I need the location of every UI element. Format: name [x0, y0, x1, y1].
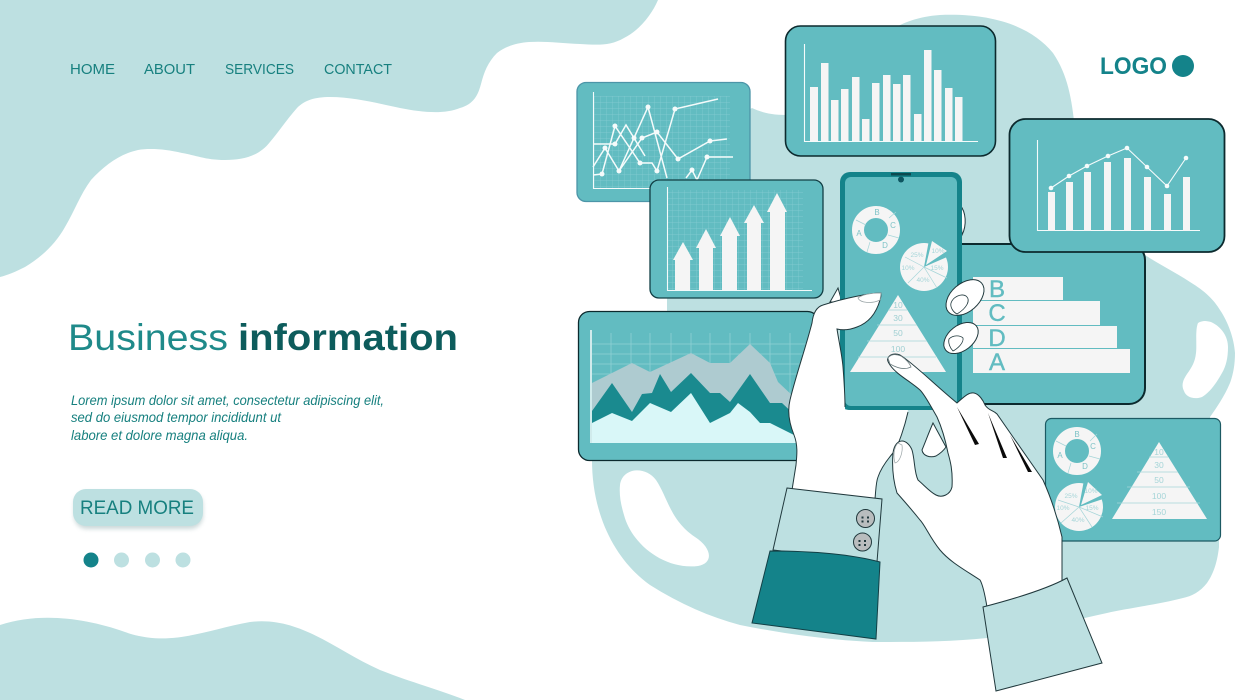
donut chart: A	[1057, 451, 1063, 460]
hand: curled finger	[922, 423, 946, 457]
navigation menu	[70, 61, 392, 78]
body text: sed do eiusmod tempor incididunt ut	[71, 409, 282, 425]
read more button: READ MORE	[80, 498, 194, 519]
pyramid chart: 150	[1152, 507, 1166, 517]
panel: line and bar chart right	[1010, 119, 1224, 252]
title: information	[238, 317, 458, 358]
logo: LOGO	[1100, 53, 1167, 80]
navigation menu: ABOUT	[144, 61, 195, 78]
panel: stepped bars	[930, 244, 1145, 404]
phone	[840, 172, 962, 410]
panel: small charts	[1046, 418, 1220, 541]
donut chart: D	[1082, 462, 1088, 471]
phone donut chart: C	[890, 221, 896, 230]
white blob right	[1183, 321, 1228, 398]
navigation menu: HOME	[70, 61, 115, 78]
phone donut chart: A	[856, 229, 862, 238]
pie chart: 10%	[1084, 488, 1098, 495]
hand: finger gaps	[957, 407, 1032, 472]
pyramid chart: 10	[1154, 447, 1164, 457]
background blob: centre	[592, 15, 1235, 642]
panel: arrow chart	[650, 180, 823, 298]
hand: finger two	[938, 316, 984, 360]
right cuff	[983, 578, 1102, 691]
background blob: top left	[0, 0, 658, 277]
panel: stepped bars: A	[989, 349, 1005, 376]
body text	[71, 392, 384, 443]
body text: labore et dolore magna aliqua.	[71, 427, 248, 443]
read more button	[73, 489, 203, 529]
phone pyramid chart	[850, 295, 946, 372]
pie chart	[1055, 480, 1105, 531]
phone pie chart: 25%	[910, 252, 924, 259]
phone donut chart: D	[882, 241, 888, 250]
hand: right hand	[888, 354, 1062, 620]
panel: stepped bars: C	[988, 300, 1006, 327]
donut chart: C	[1090, 442, 1096, 451]
phone pyramid chart: 50	[893, 328, 903, 338]
phone pyramid chart: 30	[893, 313, 903, 323]
button lower	[854, 533, 872, 551]
panel: bar chart top	[786, 26, 996, 156]
hand: index nail	[888, 355, 911, 368]
navigation menu: SERVICES	[225, 61, 294, 78]
phone pie chart: 10%	[931, 248, 945, 255]
pie chart: 40%	[1071, 517, 1085, 524]
left cuff	[773, 488, 882, 562]
button upper	[856, 510, 874, 528]
background blob: bottom left	[0, 618, 465, 700]
phone pyramid chart: 100	[891, 344, 905, 354]
pagination dots	[84, 552, 190, 568]
phone pie chart: 15%	[930, 265, 944, 272]
hand: fingers behind phone	[830, 205, 965, 302]
pyramid chart: 100	[1152, 491, 1166, 501]
hand: finger one	[939, 273, 991, 322]
navigation menu: CONTACT	[324, 61, 392, 78]
donut chart: B	[1074, 430, 1080, 439]
hand: left hand with thumb	[789, 293, 908, 499]
white blob left	[620, 470, 709, 566]
panel: stepped bars: B	[989, 276, 1005, 303]
left sleeve	[752, 551, 880, 639]
phone pie chart: 40%	[916, 277, 930, 284]
phone pie chart	[900, 240, 951, 291]
pie chart: 15%	[1085, 505, 1099, 512]
pyramid chart: 50	[1154, 475, 1164, 485]
pie chart: 10%	[1056, 505, 1070, 512]
pyramid chart	[1112, 442, 1207, 519]
title	[68, 317, 458, 358]
phone donut chart: B	[874, 208, 880, 217]
phone donut chart	[856, 208, 899, 252]
pie chart: 25%	[1064, 493, 1078, 500]
panel: stepped bars: D	[988, 325, 1006, 352]
hand: thumb nail right	[894, 443, 902, 463]
phone pyramid chart: 10	[893, 300, 903, 310]
donut chart	[1056, 430, 1100, 473]
title: Business	[68, 317, 228, 358]
pyramid chart: 30	[1154, 460, 1164, 470]
body text: Lorem ipsum dolor sit amet, consectetur adipiscing elit,	[71, 392, 384, 408]
phone pie chart: 10%	[901, 265, 915, 272]
panel: line chart	[577, 82, 750, 202]
panel: area chart	[578, 312, 818, 460]
